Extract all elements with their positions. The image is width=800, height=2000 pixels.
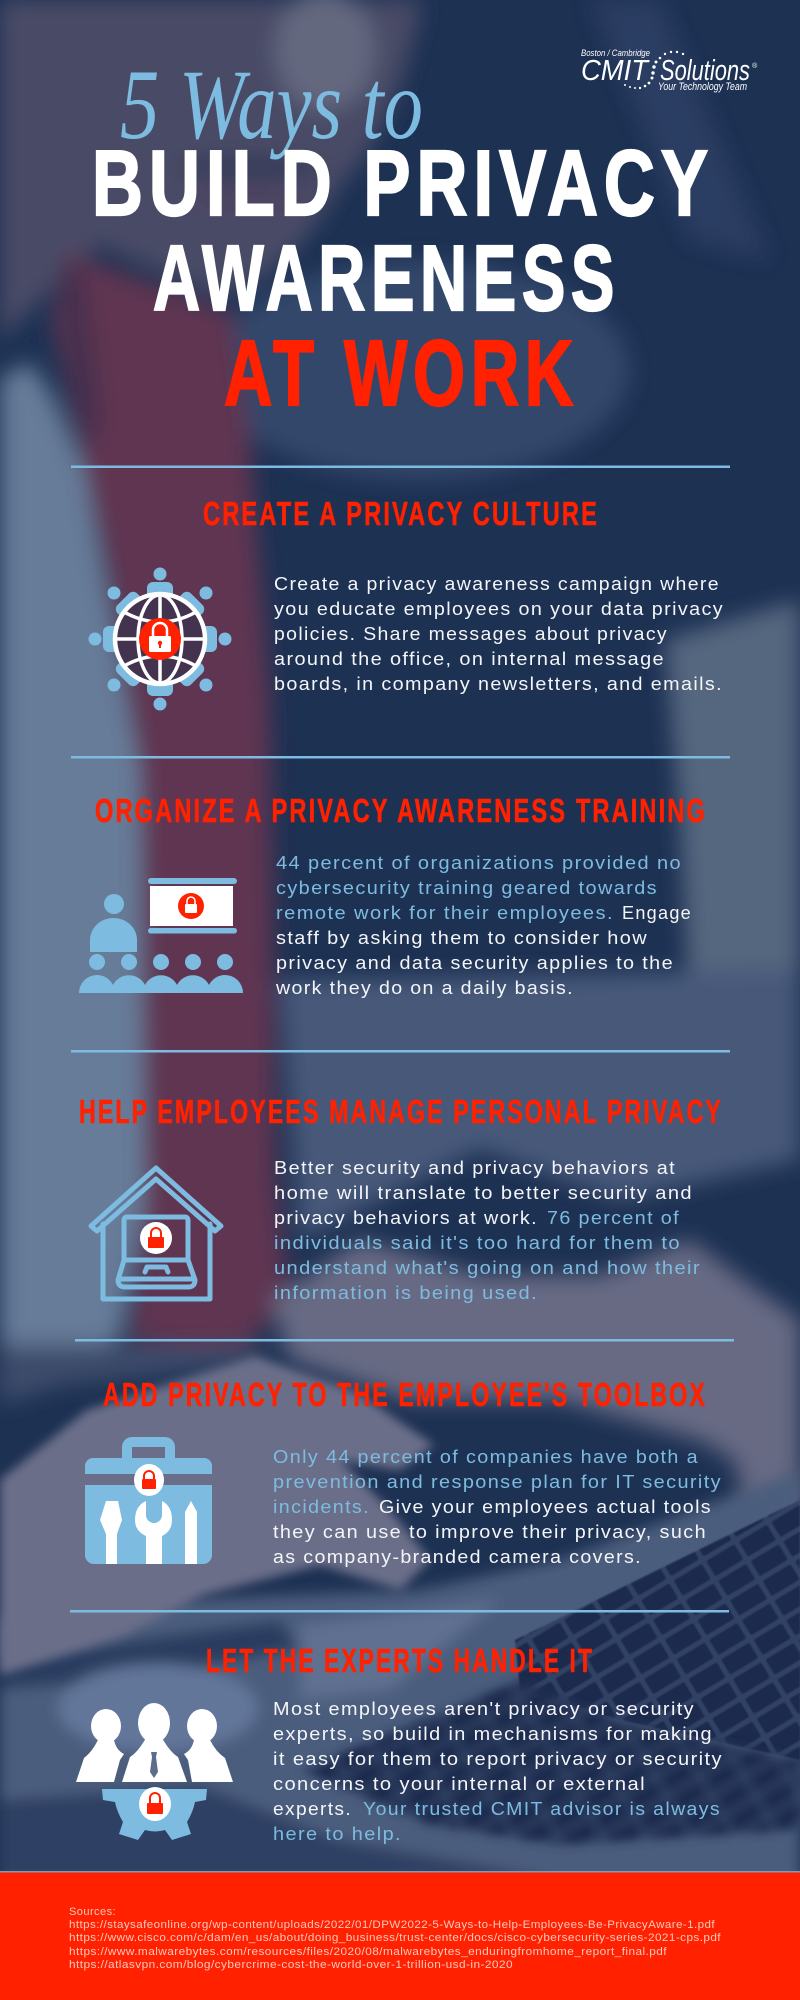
- text block: around the office, on internal message: [274, 648, 665, 669]
- text block: it easy for them to report privacy or security: [273, 1748, 723, 1769]
- text block: [273, 1698, 723, 1844]
- text block: remote work for their employees.: [276, 902, 614, 923]
- text block: work they do on a daily basis.: [275, 977, 574, 998]
- panel: help employees manage personal privacy: [79, 1093, 723, 1303]
- text block: [273, 1446, 722, 1567]
- laptop body: [0, 1470, 800, 1900]
- sources text: https://atlasvpn.com/blog/cybercrime-cost-the-world-over-1-trillion-usd-in-2020: [69, 1959, 513, 1971]
- text block: prevention and response plan for IT security: [273, 1471, 722, 1492]
- text block: experts, so build in mechanisms for making: [273, 1723, 713, 1744]
- text block: concerns to your internal or external: [273, 1773, 646, 1794]
- logo: CMIT: [581, 55, 650, 87]
- text block: 44 percent of organizations provided no: [276, 852, 682, 873]
- text block: Give your employees actual tools: [379, 1496, 712, 1517]
- heading: CREATE A PRIVACY CULTURE: [203, 495, 599, 532]
- sources text: https://www.cisco.com/c/dam/en_us/about/doing_business/trust-center/docs/cisco-cybersecurity-series-2021-cps.pdf: [69, 1932, 722, 1944]
- logo: Your Technology Team: [658, 81, 747, 93]
- icon: globe with lock and people: [88, 568, 232, 710]
- logo: ®: [752, 62, 758, 70]
- text block: you educate employees on your data privacy: [274, 598, 724, 619]
- footer: sources: [0, 1871, 800, 2000]
- text block: Engage: [622, 902, 692, 923]
- text block: [274, 573, 724, 694]
- heading: LET THE EXPERTS HANDLE IT: [206, 1642, 594, 1679]
- text block: experts.: [273, 1798, 352, 1819]
- text block: privacy behaviors at work.: [274, 1207, 538, 1228]
- title line: AT WORK: AT WORK: [224, 321, 579, 425]
- hand: [0, 1356, 434, 1675]
- text block: Most employees aren't privacy or security: [273, 1698, 695, 1719]
- icon: presenter with audience: [79, 878, 243, 993]
- icon: toolbox with lock: [85, 1437, 212, 1564]
- text block: Only 44 percent of companies have both a: [273, 1446, 699, 1467]
- text block: understand what's going on and how their: [274, 1257, 701, 1278]
- logo: [581, 48, 758, 93]
- title line: AWARENESS: AWARENESS: [153, 226, 620, 330]
- text block: incidents.: [273, 1496, 370, 1517]
- icon: three experts above gear with lock: [76, 1703, 233, 1840]
- text block: staff by asking them to consider how: [276, 927, 648, 948]
- text block: home will translate to better security and: [274, 1182, 693, 1203]
- logo: Boston / Cambridge: [581, 48, 650, 59]
- text block: cybersecurity training geared towards: [276, 877, 658, 898]
- text block: Your trusted CMIT advisor is always: [363, 1798, 721, 1819]
- text block: [274, 1157, 701, 1303]
- text block: here to help.: [273, 1823, 402, 1844]
- text block: privacy and data security applies to the: [276, 952, 674, 973]
- text block: as company-branded camera covers.: [273, 1546, 642, 1567]
- text block: Better security and privacy behaviors at: [274, 1157, 676, 1178]
- panel: let the experts handle it: [76, 1642, 723, 1844]
- text block: Create a privacy awareness campaign where: [274, 573, 720, 594]
- sources text: [69, 1906, 722, 1971]
- sources text: Sources:: [69, 1906, 116, 1918]
- sources text: https://staysafeonline.org/wp-content/uploads/2022/01/DPW2022-5-Ways-to-Help-Employees-Be-PrivacyAware-1.pdf: [69, 1919, 716, 1931]
- script line: 5 Ways to: 5 Ways to: [120, 49, 423, 160]
- text block: boards, in company newsletters, and emails.: [274, 673, 723, 694]
- panel: organize a privacy awareness training: [79, 792, 707, 998]
- text block: policies. Share messages about privacy: [274, 623, 668, 644]
- sources text: https://www.malwarebytes.com/resources/files/2020/08/malwarebytes_enduringfromhome_report_final.pdf: [69, 1946, 668, 1958]
- keyboard: [515, 1500, 800, 1760]
- text block: they can use to improve their privacy, such: [273, 1521, 707, 1542]
- panel: create a privacy culture: [88, 495, 724, 710]
- panel: add privacy to the employee's toolbox: [85, 1376, 722, 1567]
- logo: Solutions: [660, 55, 750, 87]
- text block: information is being used.: [274, 1282, 538, 1303]
- text block: [275, 852, 692, 998]
- text block: 76 percent of: [547, 1207, 680, 1228]
- text block: individuals said it's too hard for them to: [274, 1232, 681, 1253]
- icon: house with laptop and lock: [91, 1168, 221, 1299]
